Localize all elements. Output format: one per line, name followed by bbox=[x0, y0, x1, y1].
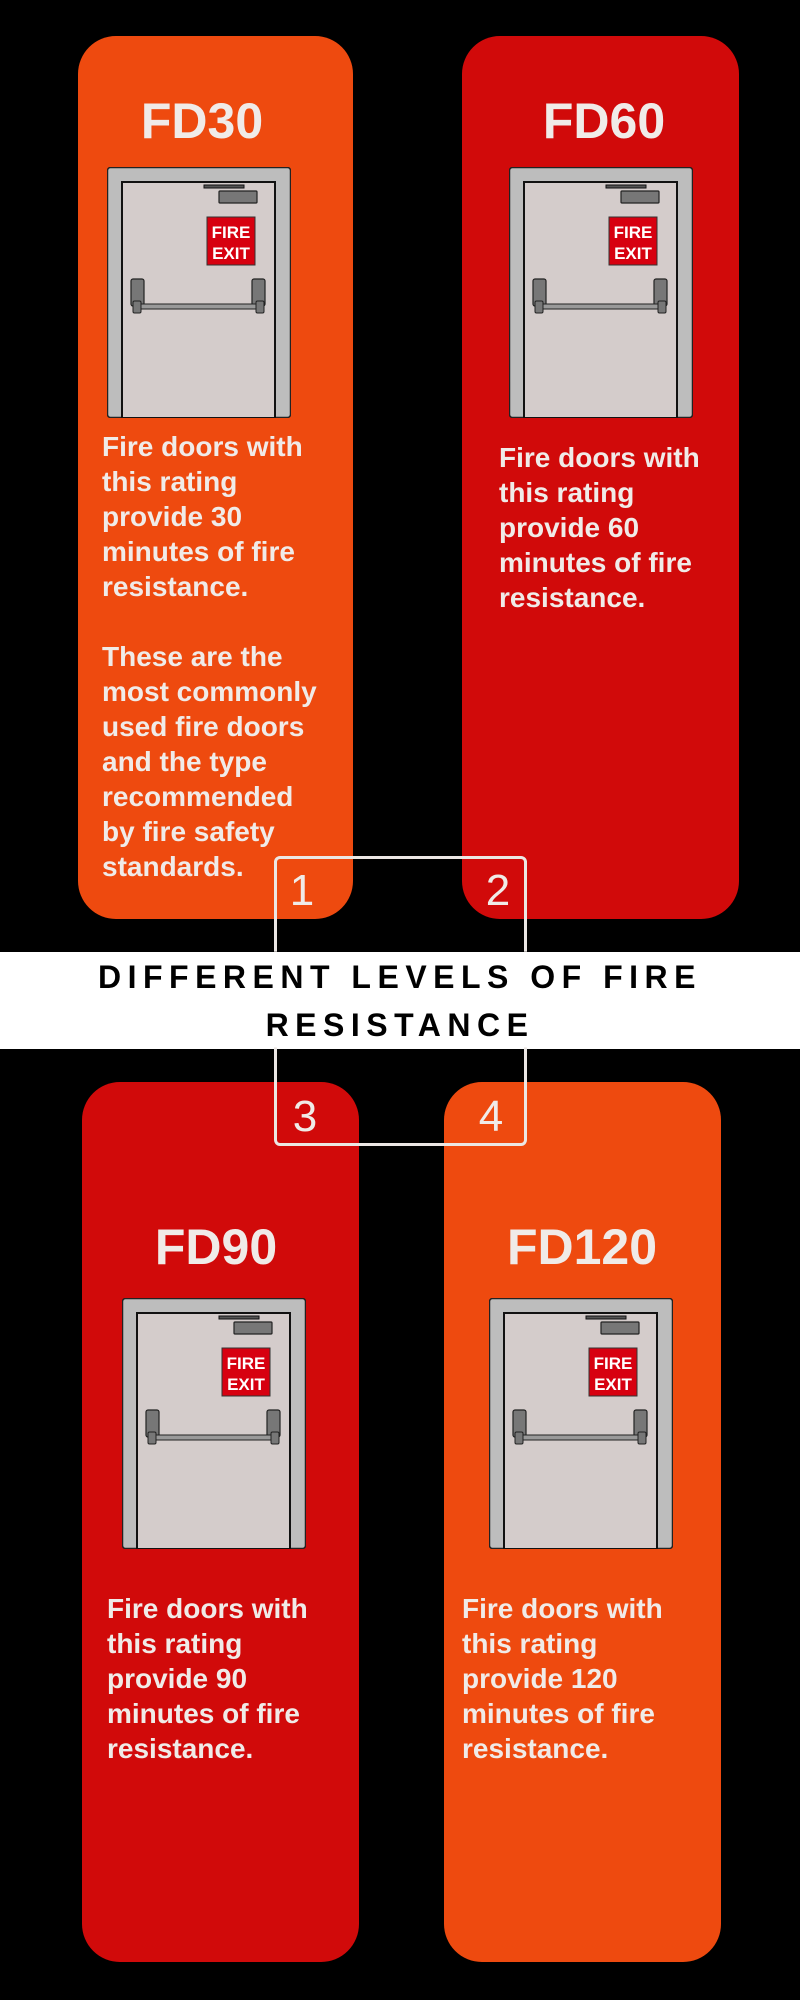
title band bbox=[0, 952, 800, 1049]
text: FD30 description bbox=[102, 431, 317, 882]
main heading: DIFFERENT LEVELS OF FIRE bbox=[98, 959, 702, 995]
icon: door FD60 bbox=[509, 167, 693, 418]
icon: door FD90 bbox=[122, 1298, 306, 1549]
panel: FD30 bbox=[78, 36, 353, 919]
number 3: 3 bbox=[293, 1092, 317, 1141]
title: FD90: FD90 bbox=[155, 1219, 277, 1275]
text: FD120 description: Fire doors with this rating provide 120 minutes of fire resistance. bbox=[462, 1593, 663, 1764]
title: FD60: FD60 bbox=[543, 93, 665, 149]
text: FD30 description: Fire doors with this rating provide 30 minutes of fire resistance. bbox=[102, 431, 303, 602]
main heading: RESISTANCE bbox=[266, 1007, 534, 1043]
panel: FD90 bbox=[82, 1082, 359, 1962]
text: FD90 description: Fire doors with this rating provide 90 minutes of fire resistance. bbox=[107, 1593, 308, 1764]
title: FD120: FD120 bbox=[507, 1219, 657, 1275]
title: FD30: FD30 bbox=[141, 93, 263, 149]
text: FD30 description: These are the most commonly used fire doors and the type recommended by fire safety standards. bbox=[102, 641, 317, 882]
number 1: 1 bbox=[290, 866, 314, 915]
icon: door FD30 bbox=[107, 167, 291, 418]
number 4: 4 bbox=[479, 1092, 503, 1141]
panel: FD60 bbox=[462, 36, 739, 919]
text: FD60 description: Fire doors with this rating provide 60 minutes of fire resistance. bbox=[499, 442, 700, 613]
number 2: 2 bbox=[486, 866, 510, 915]
outline square connector bbox=[274, 856, 527, 1146]
panel: FD120 bbox=[444, 1082, 721, 1962]
main heading bbox=[98, 959, 702, 1043]
icon: door FD120 bbox=[489, 1298, 673, 1549]
